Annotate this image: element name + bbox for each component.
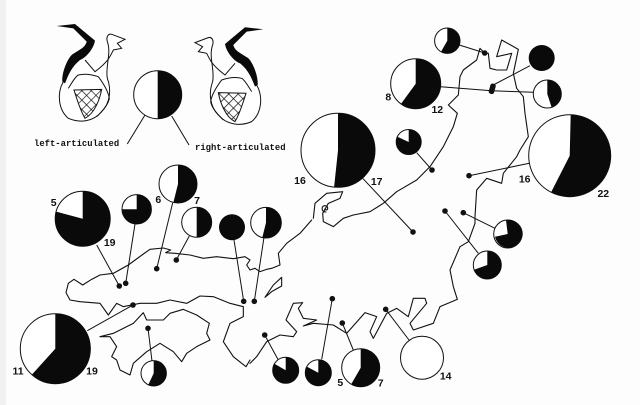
- pie: 16 / 17: [301, 113, 416, 235]
- legend: key pie: [127, 71, 189, 145]
- pie: half: [174, 207, 212, 263]
- count labels: 7: [378, 378, 384, 390]
- pie: Kii east: [305, 296, 335, 386]
- map: coastline of Japan: [66, 40, 528, 375]
- island: Awaji: [265, 277, 282, 297]
- pie: near half: [251, 207, 281, 304]
- count labels: 14: [440, 370, 452, 382]
- pie: Kanto upper: [460, 210, 523, 248]
- legend label: left: left-articulated: [34, 139, 119, 149]
- pie: Kanto lower: [442, 208, 501, 279]
- count labels: 5: [337, 377, 343, 389]
- count labels: 11: [12, 366, 24, 378]
- legend label: right: right-articulated: [195, 143, 286, 153]
- count labels: 12: [431, 104, 443, 116]
- pie: all black north: [493, 45, 555, 85]
- count labels: 22: [597, 188, 609, 200]
- marker: shared site: [488, 83, 496, 95]
- count labels: 17: [371, 176, 383, 188]
- shell: left-articulated: [57, 24, 125, 121]
- pie: quarter white: [122, 195, 151, 286]
- pie: 8 / 12: [391, 59, 492, 109]
- pie: Iwate: [492, 80, 561, 108]
- coast: Pacific shore of central Honshu: [250, 217, 475, 363]
- count labels: 16: [519, 174, 531, 186]
- island: Shikoku: [100, 309, 210, 375]
- coast: northern Honshu: [353, 40, 528, 217]
- count labels: [12, 92, 609, 390]
- pie: all white 14: [383, 306, 444, 379]
- shell: right-articulated: [195, 27, 263, 124]
- pie: Kii west: [262, 332, 299, 383]
- count labels: 7: [194, 195, 200, 207]
- coast: western Honshu north and south shores: [66, 220, 312, 367]
- count labels: 19: [104, 237, 116, 249]
- count labels: 19: [86, 366, 98, 378]
- coast: Noto peninsula: [313, 192, 353, 227]
- count labels: 5: [51, 197, 57, 209]
- pie: 5 / 7: [340, 320, 380, 387]
- count labels: 8: [385, 92, 391, 104]
- pie: 5 / 19: [55, 191, 122, 289]
- pie: 6 / 7: [154, 165, 197, 272]
- count labels: 16: [294, 175, 306, 187]
- pie: all black west: [219, 214, 246, 304]
- count labels: 6: [155, 194, 161, 206]
- pie: 11 / 19: [20, 302, 136, 384]
- pie: 16 / 22: [466, 115, 611, 197]
- pie: Niigata: [396, 129, 435, 173]
- pie: Shikoku: [141, 326, 166, 386]
- pie: Aomori: [435, 28, 488, 56]
